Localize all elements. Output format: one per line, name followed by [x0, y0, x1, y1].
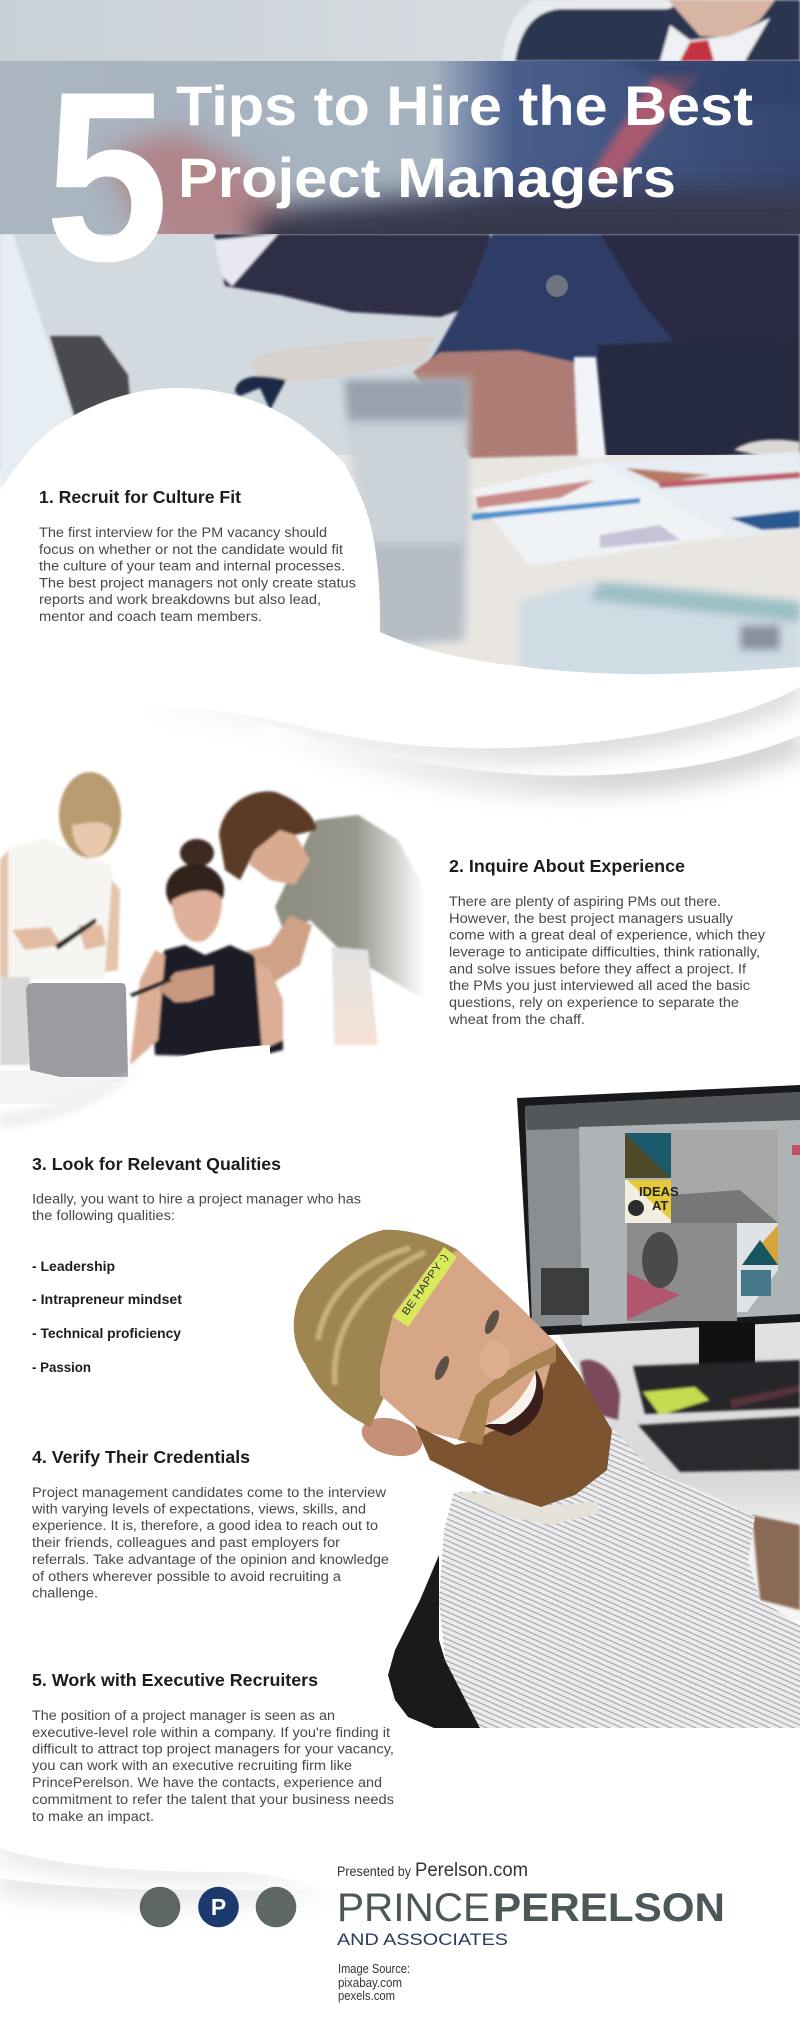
body text 4: challenge. — [32, 1586, 98, 1602]
office chair — [388, 1555, 480, 1728]
panel: hero photo of executive at desk — [0, 0, 800, 680]
band background — [0, 61, 800, 234]
body text 4: with varying levels of expectations, views, skills, and — [31, 1502, 366, 1518]
body text 5: difficult to attract top project managers for your vacancy, — [32, 1742, 394, 1758]
monitor stand — [699, 1322, 755, 1382]
icon: grey circle left — [140, 1887, 180, 1927]
body text 2: However, the best project managers usually — [449, 911, 734, 927]
body text 5 — [32, 1708, 394, 1825]
qualities list: - Technical proficiency — [32, 1326, 181, 1342]
photo: three colleagues at a laptop — [0, 772, 425, 1130]
ear — [357, 1412, 427, 1462]
heading 4: 4. Verify Their Credentials — [32, 1447, 250, 1467]
section 3: look for relevant qualities — [32, 1154, 361, 1376]
photo: suit body — [214, 234, 800, 460]
qualities list: - Intrapreneur mindset — [32, 1292, 182, 1308]
body text 5: executive-level role within a company. If you're finding it — [32, 1725, 390, 1741]
body text 1: focus on whether or not the candidate would fit — [39, 542, 343, 558]
section 4: verify their credentials — [31, 1447, 389, 1602]
body text 4: referrals. Take advantage of the opinion and knowledge — [32, 1552, 389, 1568]
body text 1: reports and work breakdowns but also lead, — [39, 592, 321, 608]
image sources: pixabay.com — [338, 1976, 402, 1990]
icon: grey circle right — [256, 1887, 296, 1927]
photo: suit and shirt at top — [502, 0, 800, 61]
face — [380, 1250, 580, 1450]
heading 2: 2. Inquire About Experience — [449, 856, 685, 876]
logo: Prince Perelson and Associates: AND ASSOCIATES — [337, 1930, 508, 1949]
body text 1: The first interview for the PM vacancy should — [39, 525, 327, 541]
heading 1: 1. Recruit for Culture Fit — [39, 487, 241, 507]
sticky note: be happy — [393, 1247, 457, 1327]
photo: wall background — [0, 0, 800, 470]
shirt collar — [454, 1492, 600, 1525]
body text 1: mentor and coach team members. — [39, 609, 262, 625]
man's arm — [752, 1515, 800, 1610]
hair streaks — [318, 1248, 425, 1385]
body text 4: their friends, colleagues and past employers for — [32, 1535, 340, 1551]
moustache — [458, 1345, 556, 1445]
title text: Tips to Hire the Best — [176, 74, 753, 137]
body text 2: leverage to anticipate difficulties, think rationally, — [449, 944, 760, 960]
image sources — [338, 1962, 410, 2003]
mouth and smile — [484, 1370, 543, 1436]
monitor screen — [525, 1092, 800, 1327]
design layouts on screen — [541, 1130, 800, 1321]
screen toolbar — [525, 1092, 800, 1130]
section 1: recruit for culture fit — [39, 487, 356, 625]
qualities list — [32, 1259, 182, 1376]
body text 5: PrincePerelson. We have the contacts, experience and — [32, 1775, 382, 1791]
body text 2: come with a great deal of experience, which they — [449, 928, 766, 944]
presented by line: Perelson.com — [415, 1859, 528, 1881]
man shirt and arm — [160, 815, 425, 1045]
body text 4: of others wherever possible to avoid recruiting a — [32, 1569, 341, 1585]
body text 5: you can work with an executive recruiting firm like — [32, 1758, 352, 1774]
artboard — [579, 1120, 800, 1326]
title text: Project Managers — [178, 146, 676, 209]
hair — [294, 1230, 458, 1427]
panel: title band over blurred photo — [0, 61, 800, 234]
photo: lower wall — [0, 234, 480, 464]
title text — [176, 74, 753, 209]
body text 2: the PMs you just interviewed all aced the basic — [449, 978, 750, 994]
footer social icons — [140, 1887, 296, 1927]
design layouts on screen: IDEAS — [639, 1184, 679, 1199]
body text 2: There are plenty of aspiring PMs out there. — [449, 894, 721, 910]
intro text 3 — [32, 1192, 361, 1224]
body text 1: The best project managers not only create status — [39, 576, 356, 592]
wave divider with shadows — [138, 687, 800, 776]
seated woman — [130, 839, 283, 1065]
qualities list: - Leadership — [32, 1259, 115, 1275]
presented by line — [337, 1859, 528, 1881]
intro text 3: the following qualities: — [32, 1208, 175, 1224]
body text 5: The position of a project manager is seen as an — [32, 1708, 335, 1724]
body text 2 — [448, 894, 766, 1028]
footer wave — [0, 1848, 337, 1892]
body text 5: to make an impact. — [32, 1809, 154, 1825]
monitor frame — [517, 1085, 800, 1336]
photo: table — [300, 455, 800, 680]
sticky note: be happy: BE HAPPY :) — [400, 1252, 451, 1318]
icon: navy P circle: P — [211, 1894, 226, 1920]
photo: magazines — [470, 452, 800, 566]
body text 2: wheat from the chaff. — [448, 1012, 585, 1028]
photo: monitor on desk behind smiling man — [294, 1085, 800, 1728]
photo: clasped hands and cuff — [413, 350, 800, 465]
photo: jacket button — [546, 275, 568, 297]
band blurred details — [103, 61, 800, 234]
pointing hand and pen — [130, 965, 214, 1003]
section 5: work with executive recruiters — [32, 1670, 394, 1825]
heading 3: 3. Look for Relevant Qualities — [32, 1154, 281, 1174]
body text 1 — [39, 525, 356, 625]
body text 2: and solve issues before they affect a project. If — [449, 962, 746, 978]
image sources: pexels.com — [338, 1989, 395, 2003]
table and white wave — [0, 1045, 270, 1130]
left woman — [0, 772, 121, 1065]
eyes and nose — [432, 1308, 510, 1382]
photo: chair armrest — [235, 336, 434, 410]
body text 2: questions, rely on experience to separate the — [449, 995, 739, 1011]
body text 1: the culture of your team and internal processes. — [39, 558, 345, 574]
section 2: inquire about experience — [448, 856, 766, 1028]
heading 5: 5. Work with Executive Recruiters — [32, 1670, 318, 1690]
logo: Prince Perelson and Associates: PRINCE — [337, 1886, 490, 1930]
logo: Prince Perelson and Associates: PERELSON — [493, 1886, 725, 1930]
image sources: Image Source: — [338, 1962, 410, 1976]
body text 5: commitment to refer the talent that your business needs — [32, 1792, 394, 1808]
laptop — [26, 983, 128, 1077]
design layouts on screen: AT — [652, 1198, 668, 1213]
man head and hair — [219, 791, 316, 885]
panel: white curved cut-out over photo — [0, 388, 800, 800]
desk background — [556, 1318, 800, 1620]
intro text 3: Ideally, you want to hire a project manager who has — [32, 1192, 361, 1208]
logo: Prince Perelson and Associates — [337, 1886, 725, 1949]
photo: laptop edge and dark chair — [0, 234, 130, 490]
desk items and keyboards — [580, 1360, 800, 1472]
striped shirt — [439, 1427, 800, 1728]
body text 4: Project management candidates come to the interview — [32, 1485, 387, 1501]
title numeral 5: 5 — [45, 42, 169, 312]
body text 4: experience. It is, therefore, a good idea to reach out to — [32, 1518, 378, 1534]
photo: drinking glass — [341, 378, 470, 650]
photo: blurred foreground magazine — [520, 580, 800, 680]
beard — [415, 1343, 612, 1507]
qualities list: - Passion — [32, 1360, 91, 1376]
icon: navy P circle — [198, 1887, 239, 1927]
presented by line: Presented by — [337, 1864, 411, 1879]
body text 4 — [31, 1485, 389, 1602]
